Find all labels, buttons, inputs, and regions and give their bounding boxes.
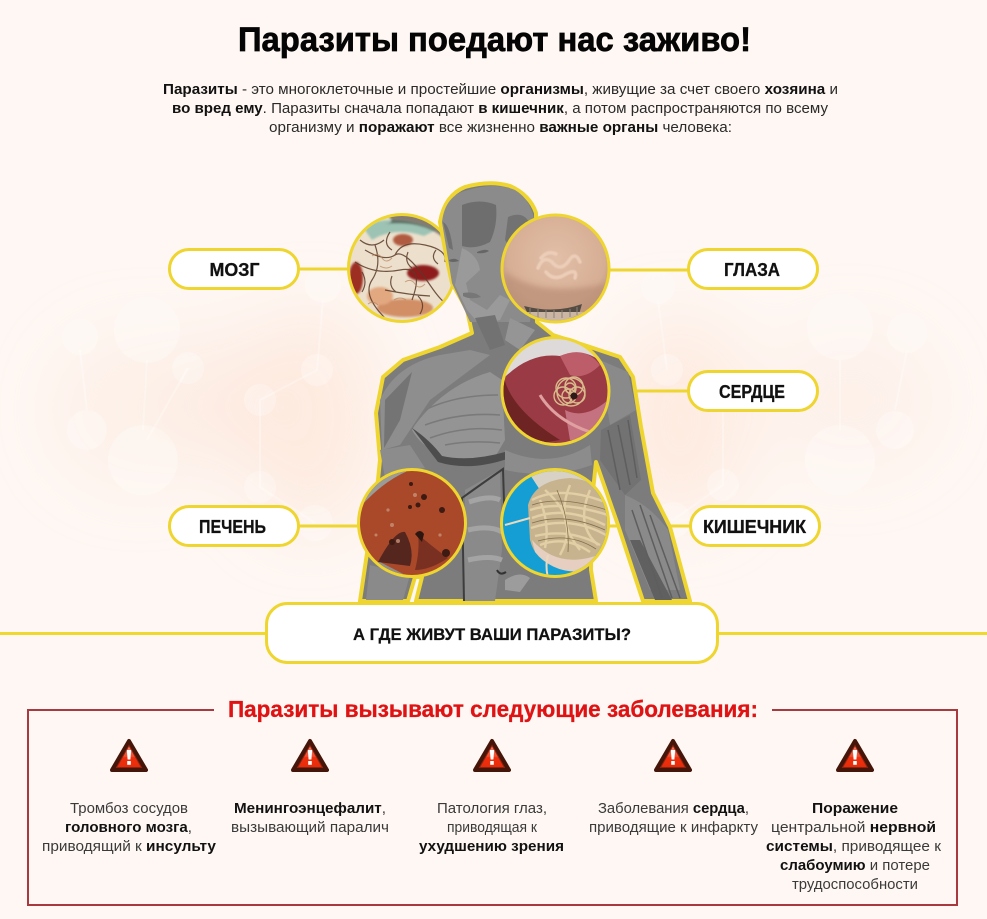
disease 3: eyes: приводящая к xyxy=(447,819,537,836)
icon: warning triangle xyxy=(656,741,690,770)
label: intestine: КИШЕЧНИК xyxy=(703,517,807,537)
disease 1: stroke: Тромбоз сосудов xyxy=(70,800,188,817)
label: brain xyxy=(170,250,298,288)
illustration: human body xyxy=(360,183,690,601)
disease 2: meningoencephalitis: вызывающий паралич xyxy=(231,819,389,836)
label: intestine xyxy=(690,506,820,546)
icon: warning triangle xyxy=(475,741,509,770)
disease 2: meningoencephalitis xyxy=(231,741,389,836)
photo circle: heart xyxy=(500,337,612,450)
disease 3: eyes: Патология глаз, xyxy=(437,800,547,817)
disease 5: nervous system: центральной нервной xyxy=(771,819,936,836)
label: heart: СЕРДЦЕ xyxy=(719,382,785,402)
icon: warning triangle xyxy=(838,741,872,770)
connector lines xyxy=(298,269,691,526)
icon: warning triangle xyxy=(112,741,146,770)
call to action pill xyxy=(266,604,718,662)
disease 5: nervous system: слабоумию и потере xyxy=(780,857,930,874)
disease 1: stroke: приводящий к инсульту xyxy=(42,838,217,855)
intro text block: во вред ему. Паразиты сначала попадают в кишечник, а потом распространяются по всему xyxy=(172,100,829,117)
intro text block xyxy=(163,81,838,136)
horizontal yellow line xyxy=(0,632,987,635)
photo circle: liver xyxy=(358,470,466,580)
shoulder and chest muscles xyxy=(380,350,680,600)
body silhouette xyxy=(360,183,690,601)
call to action pill: А ГДЕ ЖИВУТ ВАШИ ПАРАЗИТЫ? xyxy=(353,625,631,644)
intro text block: организму и поражают все жизненно важные органы человека: xyxy=(269,119,732,136)
disease 5: nervous system xyxy=(766,741,941,893)
photo circle: intestine worms xyxy=(500,467,612,578)
disease 4: heart: приводящие к инфаркту xyxy=(589,819,758,836)
disease 4: heart: Заболевания сердца, xyxy=(598,800,749,817)
icon: warning triangle xyxy=(293,741,327,770)
panel frame xyxy=(28,710,957,905)
disease 1: stroke xyxy=(42,741,217,855)
label: eyes xyxy=(688,250,818,288)
disease 4: heart xyxy=(589,741,758,836)
disease 5: nervous system: Поражение xyxy=(812,800,898,817)
panel heading: Паразиты вызывают следующие заболевания: xyxy=(228,696,758,722)
title: Паразиты поедают нас заживо! xyxy=(238,21,751,59)
label: heart xyxy=(688,372,818,410)
label: liver xyxy=(170,506,298,546)
head shading xyxy=(442,186,535,350)
disease 5: nervous system: системы, приводящее к xyxy=(766,838,941,855)
disease 3: eyes xyxy=(419,741,564,855)
photo circle: brain xyxy=(349,212,455,321)
intro text block: Паразиты - это многоклеточные и простейшие организмы, живущие за счет своего хозяина и xyxy=(163,81,838,98)
disease 2: meningoencephalitis: Менингоэнцефалит, xyxy=(234,800,386,817)
disease 1: stroke: головного мозга, xyxy=(65,819,192,836)
disease 5: nervous system: трудоспособности xyxy=(792,876,918,893)
panel: diseases xyxy=(28,696,957,905)
label: liver: ПЕЧЕНЬ xyxy=(199,517,266,537)
label: brain: МОЗГ xyxy=(210,260,260,280)
disease 3: eyes: ухудшению зрения xyxy=(419,838,564,855)
abdominal muscles xyxy=(366,469,530,601)
label: eyes: ГЛАЗА xyxy=(724,260,780,280)
photo circle: eye xyxy=(500,214,612,326)
